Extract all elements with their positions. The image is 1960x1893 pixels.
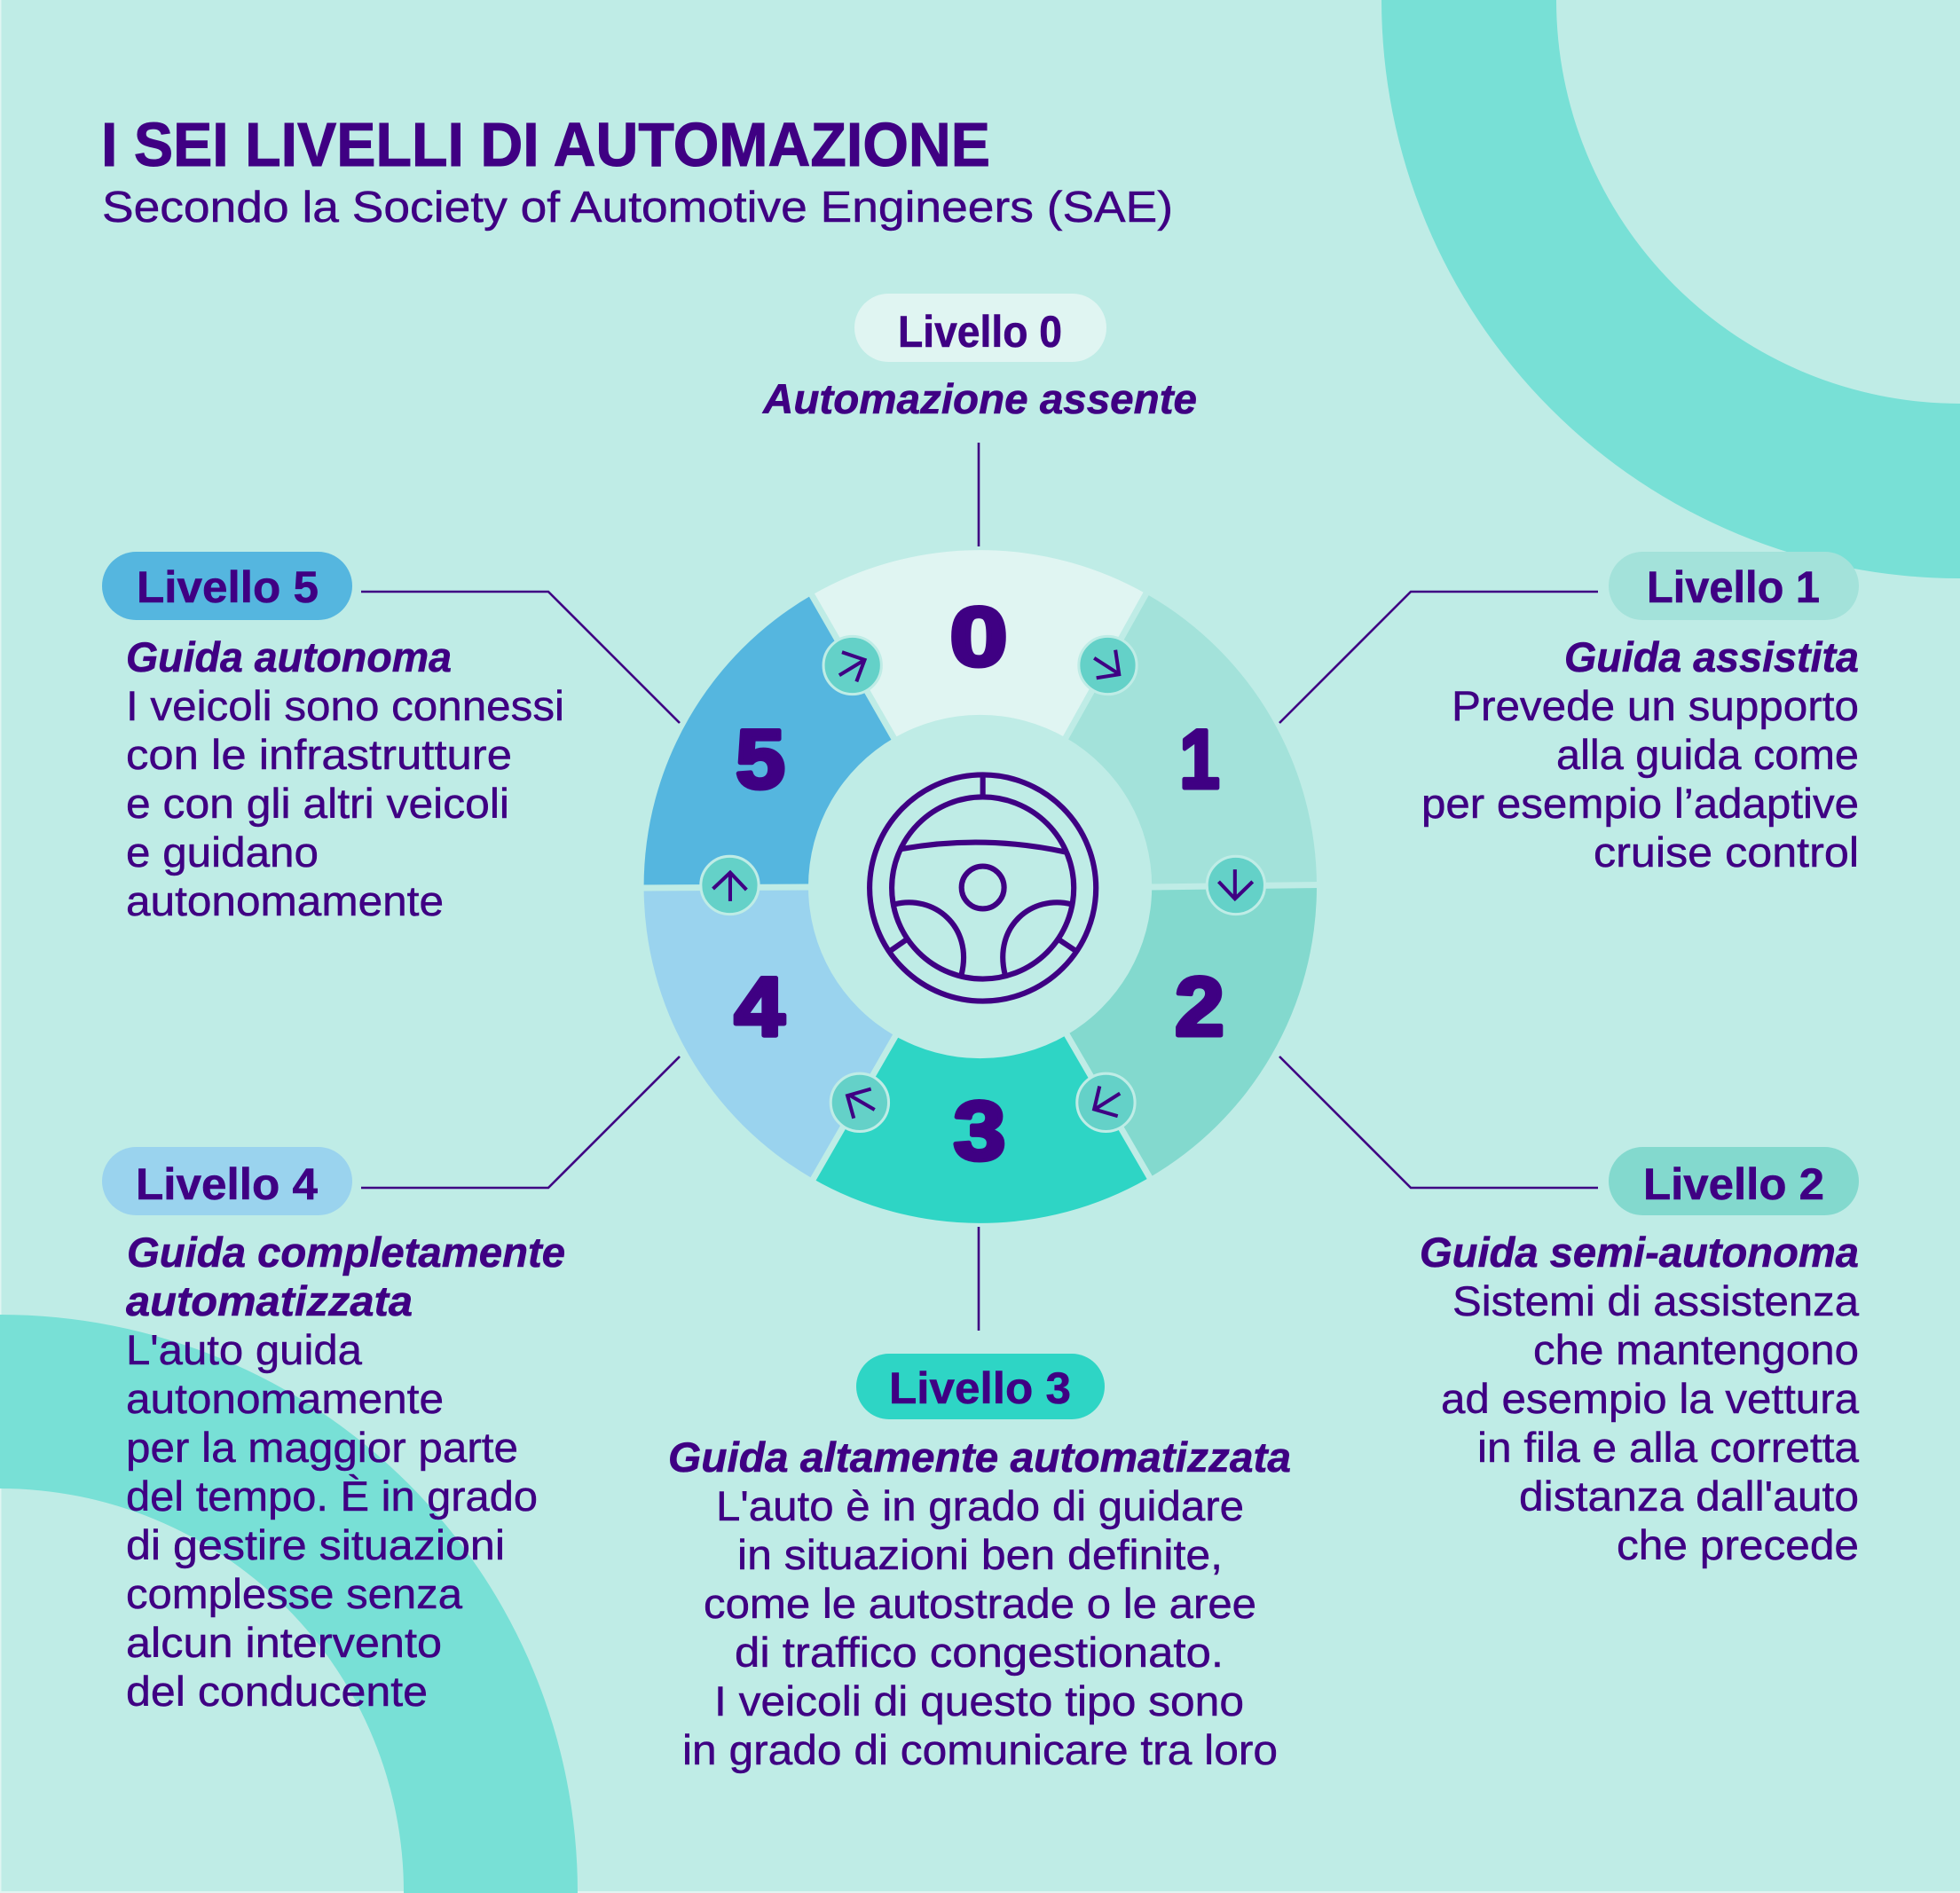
description: level 5: autonomamente [126,877,444,924]
heading: Guida completamente automatizzata [126,1229,565,1324]
description: level 2: in fila e alla corretta [1477,1424,1860,1471]
description: level 4: complesse senza [126,1570,463,1617]
arrow: 5 to 0 [823,636,881,695]
segment 1 [1066,595,1317,887]
description: level 4: del conducente [126,1668,428,1715]
pill: Livello 3: Livello 3 [889,1363,1071,1413]
pill: Livello 5 [102,552,352,620]
description: level 3: di traffico congestionato. [735,1629,1224,1676]
decorative arc: top right [1381,0,1960,578]
description: level 2: ad esempio la vettura [1441,1375,1860,1422]
description: level 4 [126,1326,538,1715]
panel: level 1 [1421,552,1859,876]
segment 5 [644,595,894,887]
heading: Guida completamente automatizzata: automatizzata [126,1277,413,1324]
donut chart [639,550,1320,1223]
panel: level 2 [1420,1147,1860,1568]
panel: level 5 [102,552,564,924]
description: level 1: per esempio l’adaptive [1421,780,1859,827]
description: level 4: di gestire situazioni [126,1521,505,1568]
description: level 3: L'auto è in grado di guidare [716,1482,1244,1529]
description: level 5: I veicoli sono connessi [126,682,564,729]
segment 3 [812,1035,1148,1223]
heading: Guida semi-autonoma: Guida semi-autonoma [1420,1229,1859,1276]
pill: Livello 2 [1609,1147,1859,1215]
segment 0 [812,550,1148,738]
arrow: 1 to 2 [1207,856,1265,915]
pill: Livello 4 [102,1147,352,1215]
description: level 5: con le infrastrutture [126,731,512,778]
segment 1: 1 [1180,712,1219,805]
heading: Guida completamente automatizzata: Guida completamente [127,1229,565,1276]
heading: Guida altamente automatizzata: Guida altamente automatizzata [668,1433,1291,1481]
pill: Livello 2: Livello 2 [1643,1159,1824,1209]
subtitle: Secondo la Society of Automotive Engineers (SAE) [102,184,1173,232]
heading: Automazione assente: Automazione assente [762,375,1197,422]
description: level 2 [1441,1277,1860,1568]
description: level 4: per la maggior parte [126,1424,518,1471]
description: level 3: in situazioni ben definite, [737,1531,1223,1578]
pill: Livello 0 [854,294,1106,362]
segment 4 [644,887,894,1178]
pill: Livello 0: Livello 0 [898,307,1062,357]
panel: level 0 [762,294,1197,422]
pill: Livello 1 [1609,552,1859,620]
description: level 3: come le autostrade o le aree [704,1580,1256,1627]
description: level 4: alcun intervento [126,1619,442,1666]
arrow: 2 to 3 [1077,1073,1135,1132]
description: level 2: distanza dall'auto [1519,1473,1859,1520]
segment 4: 4 [735,959,784,1053]
description: level 2: Sistemi di assistenza [1452,1277,1860,1324]
arrow: 3 to 4 [830,1073,889,1132]
arrow: 4 to 5 [701,856,759,915]
description: level 1 [1421,682,1859,876]
description: level 3 [682,1482,1278,1773]
description: level 5 [126,682,564,924]
description: level 2: che mantengono [1533,1326,1859,1373]
description: level 2: che precede [1617,1521,1859,1568]
decorative arc: bottom left [0,1315,578,1893]
heading: Guida autonoma: Guida autonoma [126,633,452,680]
segment 2 [1066,887,1317,1178]
segment 5: 5 [736,712,785,805]
description: level 4: del tempo. È in grado [126,1473,538,1520]
heading: Guida assistita: Guida assistita [1564,633,1859,680]
panel: level 3 [668,1354,1291,1773]
description: level 1: alla guida come [1556,731,1859,778]
pill: Livello 5: Livello 5 [137,562,319,612]
pill: Livello 3 [856,1354,1105,1419]
panel: level 4 [102,1147,565,1715]
description: level 3: in grado di comunicare tra loro [682,1726,1278,1773]
icon: steering wheel [870,774,1096,1001]
description: level 5: e con gli altri veicoli [126,780,509,827]
description: level 4: autonomamente [126,1375,444,1422]
arrow: 0 to 1 [1079,636,1137,695]
description: level 5: e guidano [126,829,319,876]
description: level 1: cruise control [1594,829,1859,876]
title: I SEI LIVELLI DI AUTOMAZIONE [101,110,990,179]
segment 3: 3 [954,1085,1005,1178]
segment 0: 0 [950,591,1007,683]
description: level 1: Prevede un supporto [1452,682,1859,729]
segment 2: 2 [1175,960,1224,1053]
pill: Livello 1: Livello 1 [1647,562,1820,612]
pill: Livello 4: Livello 4 [136,1159,318,1209]
description: level 4: L'auto guida [126,1326,363,1373]
connector lines [361,443,1598,1331]
description: level 3: I veicoli di questo tipo sono [714,1677,1244,1724]
